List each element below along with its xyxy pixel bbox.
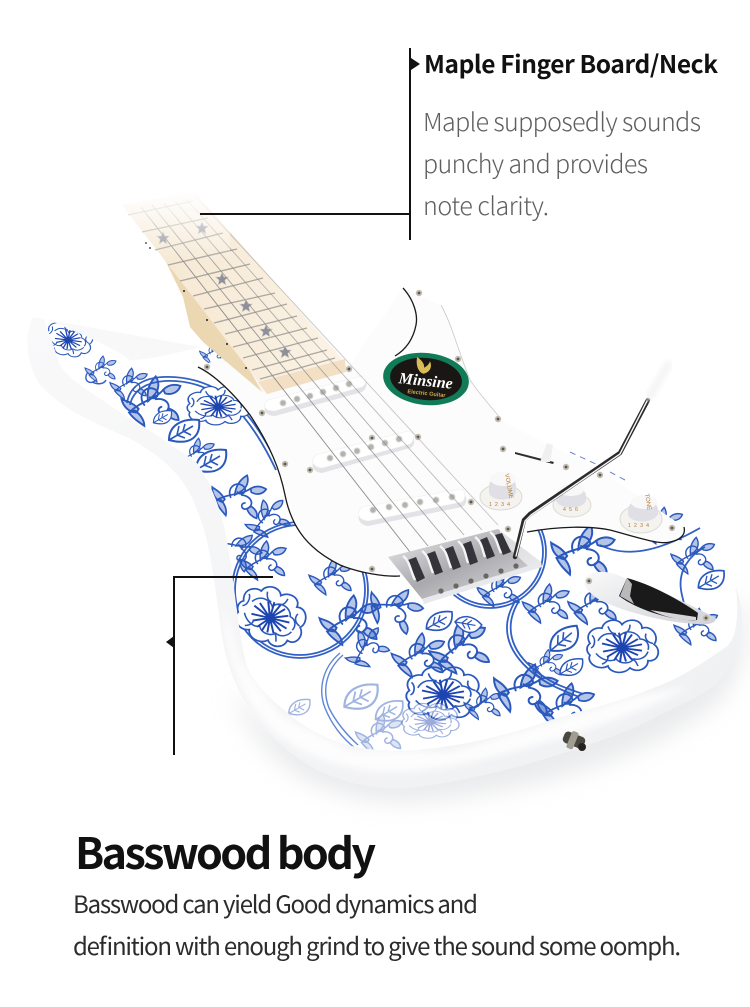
strings: [141, 197, 498, 552]
callout: body leader: [166, 577, 273, 755]
tremolo cover plate: [584, 572, 716, 624]
section: basswood body: [73, 820, 681, 962]
callout description: punchy and provides: [423, 145, 648, 181]
knob: tone 2: [620, 493, 662, 533]
callout description: [423, 103, 701, 223]
callout description: Maple supposedly sounds: [423, 103, 701, 139]
bridge: [388, 528, 542, 604]
pickup: bridge: [359, 489, 466, 526]
star inlays: [156, 222, 292, 358]
knob: tone 1: 456: [563, 507, 581, 513]
knob: tone 2: 1234: [628, 523, 652, 529]
pickguard screws: [204, 290, 675, 572]
section description: definition with enough grind to give the sound some oomph.: [73, 927, 681, 962]
frets: [128, 201, 335, 379]
callout heading: Maple Finger Board/Neck: [424, 46, 718, 81]
side dots: [145, 242, 247, 369]
callout: maple finger board: [200, 46, 718, 240]
section description: [73, 885, 681, 962]
body shadow: [232, 590, 746, 802]
tremolo arm: [515, 365, 668, 557]
pickup: neck: [265, 376, 366, 416]
section description: Basswood can yield Good dynamics and: [73, 885, 478, 920]
knob: volume: VOLUME: [503, 473, 513, 499]
knob: volume: 1234: [489, 502, 513, 508]
callout description: note clarity.: [423, 187, 549, 223]
brand text: Minsine: [397, 370, 454, 393]
leader line: [200, 48, 410, 240]
vine arcs: [127, 377, 705, 697]
saddles: [408, 533, 511, 582]
guitar body: [27, 288, 742, 788]
output jack: [562, 730, 586, 751]
fretboard and neck: [122, 192, 346, 394]
pickguard: [198, 288, 684, 576]
badge subtitle: Electric Guitar: [407, 389, 447, 399]
knob: tone 2: TONE: [643, 493, 652, 511]
faded lower vine: [322, 653, 358, 748]
flower: upper body: [187, 387, 250, 425]
pickup: middle: [313, 431, 414, 473]
knob: volume: [480, 472, 522, 510]
flower: horn: [48, 322, 94, 358]
guitar photo: [27, 165, 746, 802]
neck fade: [90, 165, 230, 265]
flame mark: [415, 357, 432, 374]
arrow marker: [411, 58, 420, 70]
flower: bottom: [406, 667, 481, 719]
flower: left: [236, 586, 307, 648]
blue floral pattern: [39, 316, 724, 753]
logo badge: [381, 349, 471, 409]
flower: right: [587, 620, 658, 672]
knob: tone 1: [553, 484, 591, 517]
section heading: Basswood body: [75, 820, 376, 882]
